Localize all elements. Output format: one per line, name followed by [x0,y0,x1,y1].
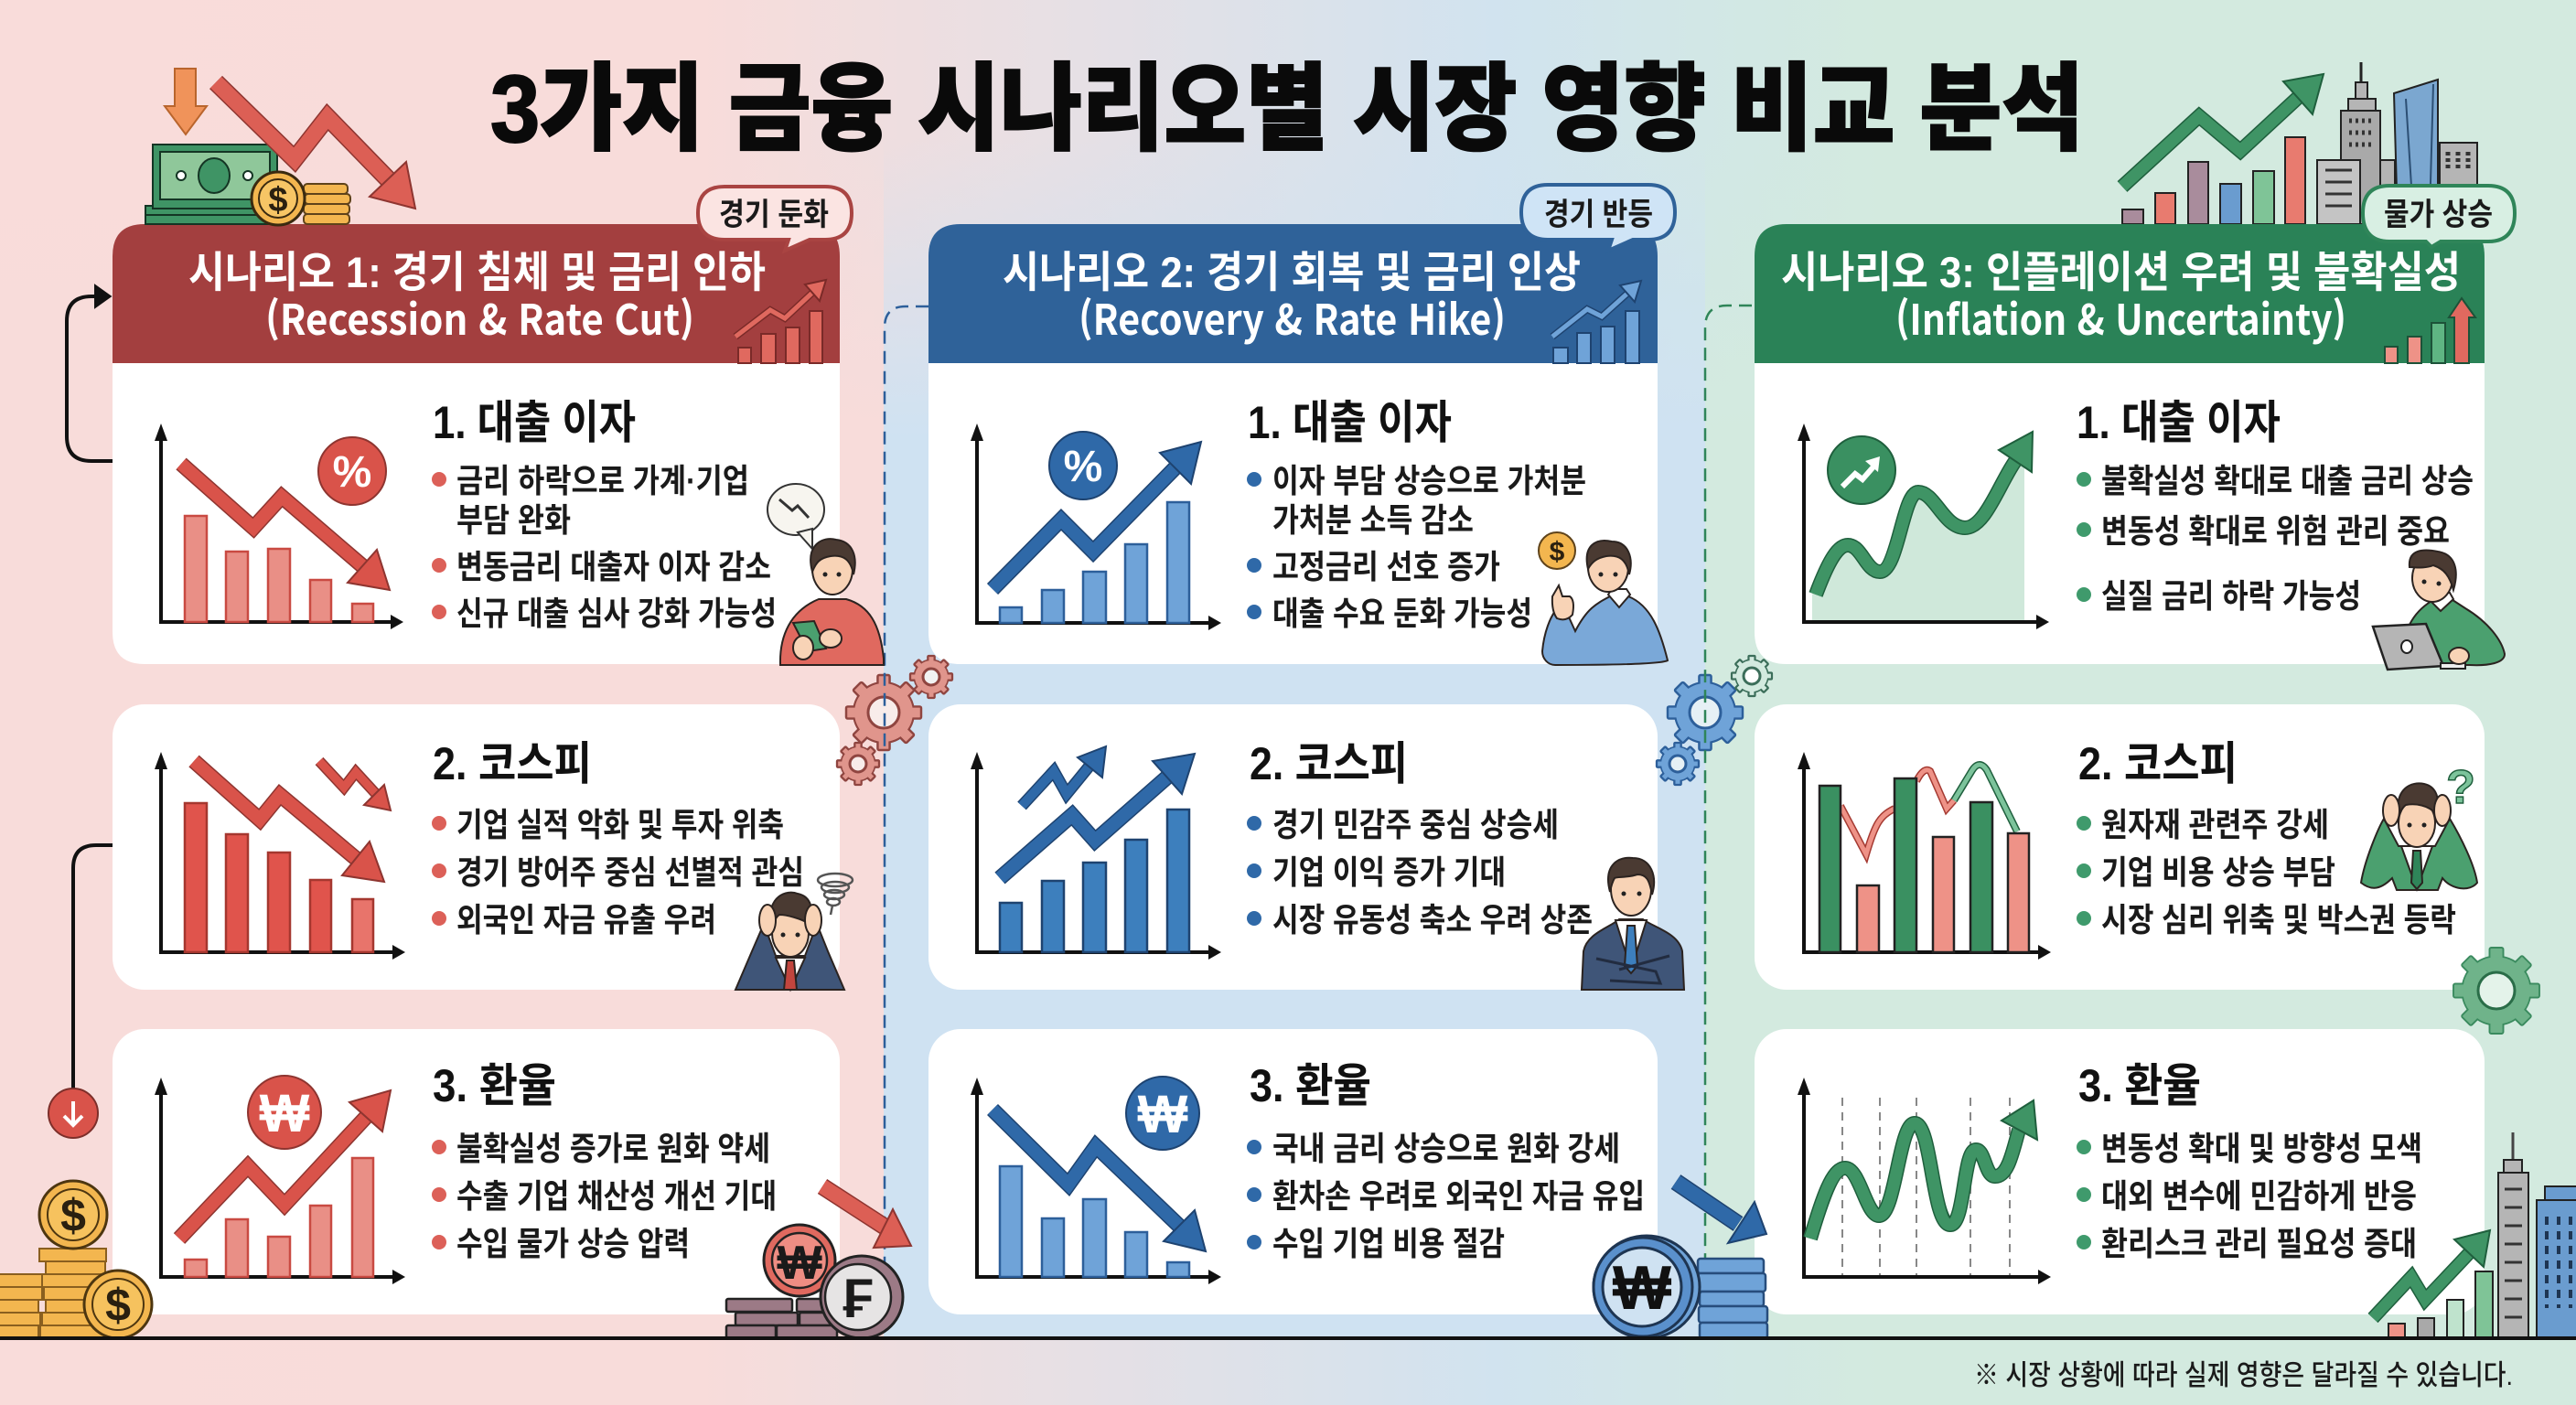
icon: percent: % [1064,443,1102,491]
icon: header mini chart [1552,281,1641,363]
illustration: coins and bricks: ₣ [843,1268,874,1329]
icon: header mini chart [735,280,826,363]
bullet list: 대외 변수에 민감하게 반응 [2101,1177,2417,1215]
connector: dashed scenario 3 [1705,306,1752,1259]
connector: loop arrow to scenario 1 [67,287,113,461]
icon: won [248,1076,321,1149]
icon: blue gears [1657,656,1772,785]
bullet list [432,462,777,632]
chart: rising exchange rate [155,1078,405,1284]
bullet list: 환리스크 관리 필요성 증대 [2101,1225,2417,1262]
icon: won: ₩ [1138,1085,1188,1144]
panel: scenario 2 exchange rate [971,1060,1645,1284]
bullet list: 기업 실적 악화 및 투자 위축 [456,806,784,843]
bullet list: 외국인 자금 유출 우려 [456,901,716,938]
illustration: blue won coin and stack: ₩ [1613,1253,1672,1323]
chart: falling KOSPI [155,752,405,960]
person: businessman arms crossed [1582,858,1684,990]
panel: scenario 1 [113,187,852,664]
icon: percent [318,437,386,505]
badge: 물가 상승 [2363,186,2515,247]
person: working on laptop [2373,551,2505,670]
heading: 3. 환율 [1250,1060,1371,1111]
person: thumbs up with coin [1539,532,1668,665]
bullet list: 부담 완화 [456,501,571,539]
scenario 3 heading text: (Inflation & Uncertainty) [1895,287,2346,348]
bullet list [1247,806,1593,938]
bullet list: 시장 유동성 축소 우려 상존 [1272,901,1593,938]
scenario 1 heading text: (Recession & Rate Cut) [265,287,694,348]
bullet list: 기업 이익 증가 기대 [1272,853,1506,891]
heading: 3. 환율 [433,1060,556,1111]
bullet list [2077,1130,2422,1262]
panel: scenario 3 [1755,186,2515,664]
person: worried with head in hands [735,874,853,990]
scenario 2 heading text [1003,248,1581,348]
panel: scenario 3 exchange rate [1798,1060,2422,1284]
scenario 2 heading text: 시나리오 2: 경기 회복 및 금리 인상 [1003,248,1581,296]
heading: 2. 코스피 [433,738,592,789]
illustration: money falling [145,69,415,225]
bullet list: 수입 기업 비용 절감 [1272,1225,1505,1262]
bullet list: 기업 비용 상승 부담 [2101,853,2335,891]
bullet list: 변동성 확대 및 방향성 모색 [2101,1130,2422,1167]
bullet list [432,1130,777,1262]
person: confused with question mark: ? [2446,761,2475,814]
bullet list: 변동금리 대출자 이자 감소 [456,548,771,585]
chart: falling loan rate [155,424,403,629]
illustration: gold coins left [0,1181,152,1338]
scenario 2 heading text: (Recovery & Rate Hike) [1079,287,1506,348]
icon: green gear [2453,948,2539,1034]
bullet list: 대출 수요 둔화 가능성 [1272,595,1532,632]
chart: rising loan rate [971,424,1221,630]
bullet list: 경기 민감주 중심 상승세 [1272,806,1559,843]
bullet list: 고정금리 선호 증가 [1272,548,1500,585]
icon: percent: % [333,448,371,497]
panel: scenario 1 exchange rate [155,1060,777,1284]
bullet list: 불확실성 증가로 원화 약세 [456,1130,770,1167]
chart: uncertain rising loan rate [1798,424,2049,629]
connector: dashed scenario 2 [885,306,928,1303]
chart: mixed KOSPI [1798,752,2051,960]
scenario 1 card 1 background [113,224,840,664]
icon: header mini chart [2385,298,2475,363]
chart: rising KOSPI [971,746,1221,960]
scenario 3 header [1755,224,2485,363]
person: thumbs up with coin: $ [1550,537,1565,567]
bullet list: 불확실성 확대로 대출 금리 상승 [2101,462,2474,499]
bullet list: 국내 금리 상승으로 원화 강세 [1272,1130,1620,1167]
bullet list [432,806,804,938]
bullet list [1247,462,1586,632]
icon: percent [1049,432,1117,499]
person: confused with question mark [2361,761,2477,890]
illustration: city skyline and rising chart [2122,62,2477,224]
scenario 1 heading text: 시나리오 1: 경기 침체 및 금리 인하 [188,248,766,296]
panel: scenario 3 KOSPI [1798,738,2477,960]
bullet list: 원자재 관련주 강세 [2101,806,2329,843]
scenario 3 heading text: 시나리오 3: 인플레이션 우려 및 불확실성 [1781,248,2461,296]
bullet list: 수출 기업 채산성 개선 기대 [456,1177,777,1215]
bullet list: 실질 금리 하락 가능성 [2101,577,2361,615]
chart: volatile exchange rate [1798,1078,2051,1284]
arrow: red to scenario 2 [822,1186,911,1248]
panel: scenario 2 loan interest [971,397,1668,665]
scenario 3 card 1 background [1755,224,2485,664]
illustration: money falling: $ [268,181,288,220]
badge: 경기 반등: 경기 반등 [1544,198,1653,232]
scenario 2 card 1 background [928,224,1658,664]
bullet list [1247,1130,1645,1262]
illustration: gold coins left: $ [105,1280,131,1331]
bullet list: 수입 물가 상승 압력 [456,1225,690,1262]
bullet list: 경기 방어주 중심 선별적 관심 [456,853,804,891]
bullet list: 시장 심리 위축 및 박스권 등락 [2101,901,2456,938]
heading: 2. 코스피 [2078,738,2238,789]
icon: won [1126,1077,1199,1150]
icon: red gears [837,656,952,785]
panel: scenario 1 loan interest [155,397,884,665]
illustration: coins and bricks [726,1225,903,1338]
panel: scenario 3 loan interest [1798,397,2505,670]
ground line [0,1336,2576,1340]
heading: 1. 대출 이자 [2077,397,2281,448]
heading: 2. 코스피 [1250,738,1408,789]
bullet list: 변동성 확대로 위험 관리 중요 [2101,512,2450,550]
scenario 2 header [928,224,1658,363]
panel: scenario 1 KOSPI [155,738,853,990]
scenario 1 header [113,224,840,363]
icon: rising badge [1828,436,1895,504]
panel: scenario 2 KOSPI [971,738,1684,990]
badge: 물가 상승: 물가 상승 [2384,198,2493,232]
scenario 1 heading text [188,248,766,348]
badge: 경기 둔화: 경기 둔화 [719,198,829,232]
arrow: blue to scenario 3 [1676,1182,1766,1243]
heading: 1. 대출 이자 [433,397,636,448]
person: checking phone [767,484,884,665]
heading: 3. 환율 [2078,1060,2201,1111]
bullet list: 신규 대출 심사 강화 가능성 [456,595,777,632]
title: 3가지 금융 시나리오별 시장 영향 비교 분석 [490,57,2084,163]
bullet list: 이자 부담 상승으로 가처분 [1272,462,1586,499]
icon: won: ₩ [260,1084,310,1143]
bullet list: 금리 하락으로 가계·기업 [456,462,749,499]
illustration: gold coins left: $ [60,1190,86,1241]
bullet list [2077,462,2474,615]
bullet list [2077,806,2456,938]
panel: scenario 2 [928,185,1675,664]
bullet list: 가처분 소득 감소 [1272,501,1474,539]
scenario 3 heading text [1781,248,2461,348]
illustration: coins and bricks: ₩ [777,1237,822,1290]
badge: 경기 반등 [1521,185,1675,251]
heading: 1. 대출 이자 [1248,397,1452,448]
badge: 경기 둔화 [698,187,852,251]
card backgrounds: KOSPI and exchange rate rows [113,704,2485,1314]
illustration: city and rising chart bottom right [2373,1132,2576,1338]
bullet list: 환차손 우려로 외국인 자금 유입 [1272,1177,1645,1215]
connector: down to exchange rate [48,845,113,1138]
chart: falling exchange rate [971,1078,1221,1284]
illustration: blue won coin and stack [1594,1236,1767,1338]
